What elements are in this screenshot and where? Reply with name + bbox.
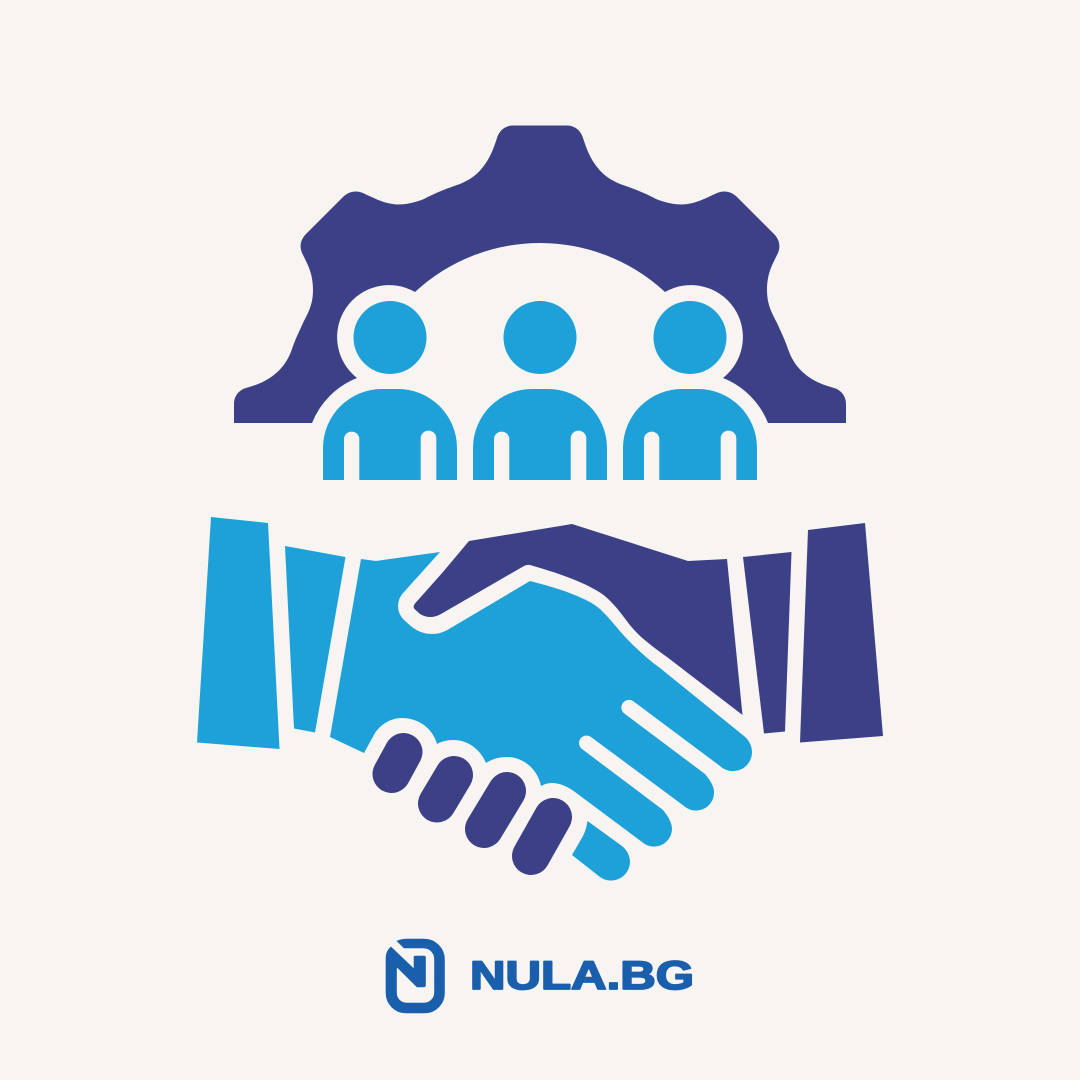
small light finger xyxy=(572,821,630,881)
left outer cuff xyxy=(197,517,280,749)
right inner cuff xyxy=(743,552,792,734)
icon: gear xyxy=(234,126,846,423)
icon: person right xyxy=(623,301,757,480)
dark hand xyxy=(414,524,742,715)
right outer cuff xyxy=(800,523,883,742)
logo wordmark: NULA.BG xyxy=(470,954,694,998)
left inner cuff xyxy=(285,546,346,732)
icon: person left xyxy=(323,301,457,480)
light blue hand xyxy=(330,552,752,847)
logo xyxy=(386,939,694,1013)
dark fingers xyxy=(392,752,553,856)
icon: person centre xyxy=(473,301,607,480)
icon: handshake xyxy=(197,517,883,881)
logo mark xyxy=(386,939,444,1013)
